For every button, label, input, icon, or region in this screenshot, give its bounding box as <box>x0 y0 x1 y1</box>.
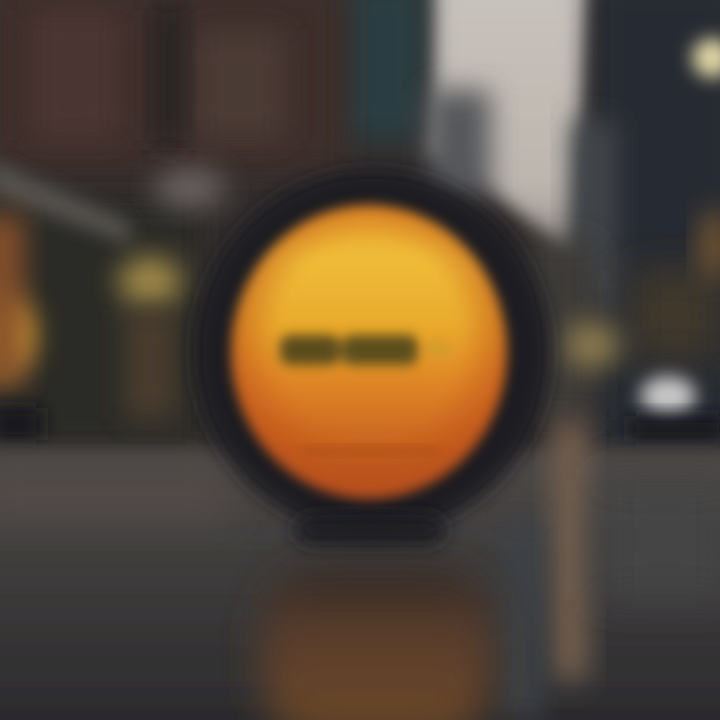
lower face band <box>300 447 440 455</box>
sign face <box>231 205 507 499</box>
round sign <box>194 170 550 545</box>
ground: wet street <box>0 420 720 720</box>
blurred sign lettering <box>280 335 450 365</box>
sign ring <box>194 170 550 534</box>
ring base shadow <box>295 515 445 545</box>
reflection of the sign <box>262 565 492 720</box>
background: awning and street lights <box>0 38 720 442</box>
